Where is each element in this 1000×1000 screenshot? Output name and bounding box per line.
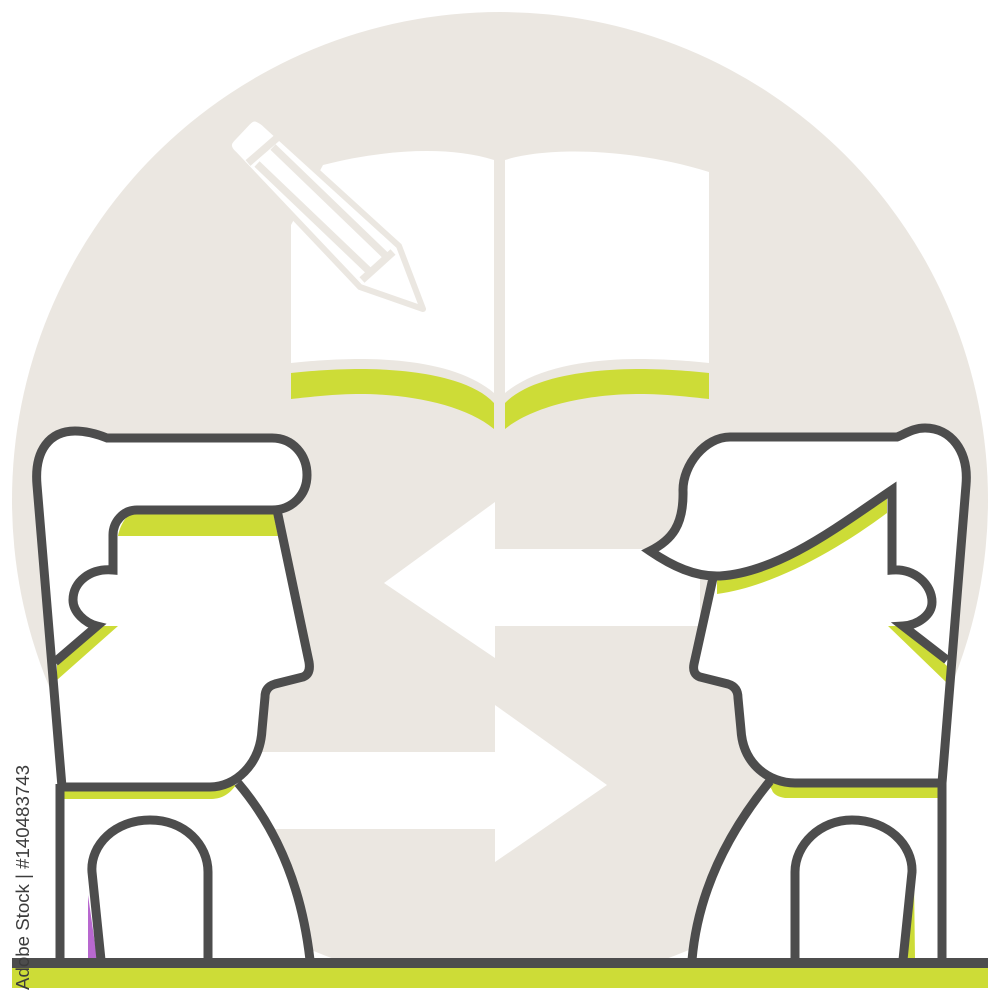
left person purple accent [88, 895, 97, 958]
person: left [37, 431, 310, 962]
person: right [650, 428, 966, 962]
left person green accents [57, 512, 278, 799]
arrow: pointing left [384, 502, 700, 658]
ground line [12, 958, 988, 988]
left person white fill [37, 431, 310, 962]
right person white fill [652, 428, 966, 962]
right person outline [650, 428, 966, 960]
stock image id label: Adobe Stock | #140483743 [13, 765, 33, 990]
left person arm [92, 820, 208, 960]
icon: pencil [229, 118, 423, 309]
right person green accents [717, 490, 947, 958]
icon: open book [291, 151, 709, 429]
right person arm [795, 820, 912, 960]
arrow: pointing right [240, 705, 607, 862]
left person outline [37, 431, 310, 960]
